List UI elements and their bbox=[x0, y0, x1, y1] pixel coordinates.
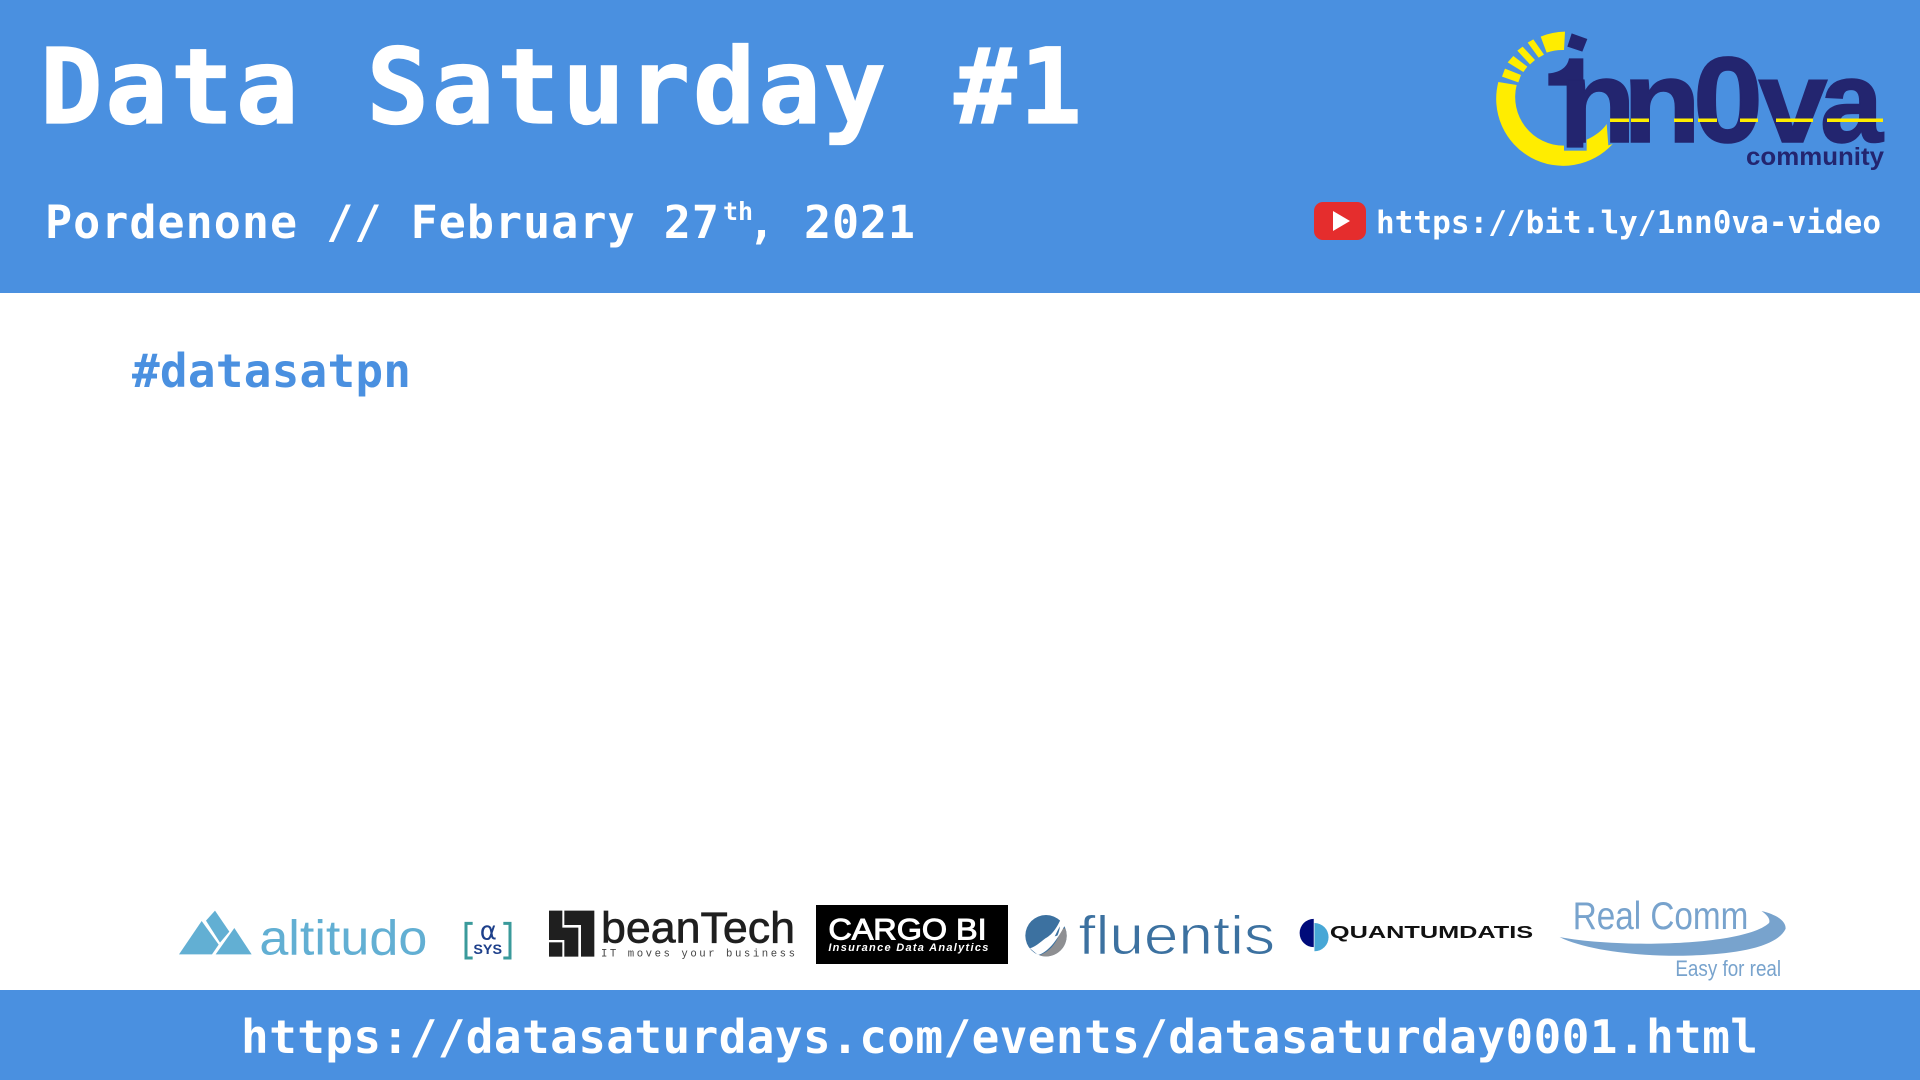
sponsor logos row bbox=[179, 895, 1786, 981]
logo wordmark: a bbox=[1820, 36, 1884, 167]
logo wordmark: n bbox=[1559, 36, 1636, 167]
fluentis wordmark: fluentis bbox=[1078, 904, 1275, 966]
event subtitle: Pordenone // February 27 bbox=[45, 196, 719, 249]
logo: alpha sys: α bbox=[480, 916, 497, 946]
logo wordmark: v bbox=[1758, 36, 1828, 167]
logo: alpha sys: SYS bbox=[473, 941, 502, 957]
logo: beanTech bbox=[549, 903, 795, 961]
header band bbox=[0, 0, 1920, 293]
title: Data Saturday #1 bbox=[40, 26, 1082, 148]
logo: fluentis bbox=[1025, 904, 1275, 966]
footer band bbox=[0, 990, 1920, 1080]
event link: https://datasaturdays.com/events/datasaturday0001.html bbox=[241, 1010, 1758, 1064]
logo stripe bbox=[1610, 118, 1883, 122]
logo: real comm: Easy for real bbox=[1675, 956, 1781, 981]
icon: youtube play button bbox=[1314, 202, 1366, 240]
fluentis icon bbox=[1025, 915, 1067, 956]
logo wordmark: 0 bbox=[1693, 32, 1763, 168]
logo: cargo bi: CARGO BI bbox=[828, 913, 987, 946]
logo wordmark: n bbox=[1622, 36, 1701, 167]
logo: alpha sys bbox=[466, 916, 510, 958]
logo: cargo bi: Insurance Data Analytics bbox=[828, 942, 988, 954]
logo: cargo bi bbox=[816, 905, 1008, 964]
beanTech icon bbox=[549, 911, 594, 957]
logo: real comm bbox=[1560, 895, 1786, 981]
logo: 1nn0va community bbox=[1496, 32, 1884, 171]
logo: real comm: Real Comm bbox=[1573, 895, 1748, 938]
event subtitle: , 2021 bbox=[748, 196, 915, 249]
logo: quantumdatis: QUANTUMDATIS bbox=[1330, 922, 1533, 942]
hashtag: #datasatpn bbox=[132, 344, 411, 398]
logo: altitudo bbox=[179, 910, 427, 965]
beanTech wordmark: beanTech bbox=[601, 903, 795, 952]
logo: altitudo: altitudo bbox=[259, 910, 427, 965]
video link: https://bit.ly/1nn0va-video bbox=[1376, 205, 1881, 241]
logo wordmark bbox=[1559, 32, 1884, 168]
logo tagline: community bbox=[1746, 143, 1884, 171]
logo: quantumdatis bbox=[1300, 919, 1533, 951]
beanTech wordmark: IT moves your business bbox=[601, 949, 795, 961]
logo ring and numeral bbox=[1496, 32, 1613, 166]
event subtitle: th bbox=[723, 197, 753, 226]
